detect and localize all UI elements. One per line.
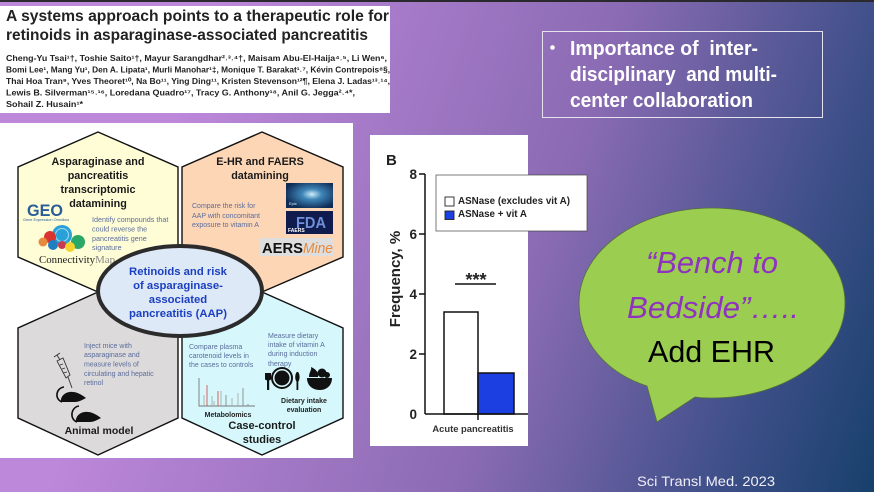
icon: mice <box>57 387 101 422</box>
y axis <box>409 167 425 422</box>
callout: bench to bedside speech bubble <box>579 208 845 422</box>
text block: animal model description <box>84 343 154 387</box>
callout: bench to bedside speech bubble: Bedside”….. <box>627 290 799 325</box>
text block: author list: Thai Hoa Tran⁹, Yves Theoret¹⁰, Na Bo¹¹, Ying Ding¹¹, Kristen Stevenson¹²¶, Elena J. Ladas¹³˒¹⁴, <box>6 76 390 86</box>
icon: Connectivity Map logo: ConnectivityMap <box>39 255 115 266</box>
label: metabolomics: Metabolomics <box>205 412 251 419</box>
centre oval: retinoids and AAP risk <box>98 246 262 336</box>
hexagon: transcriptomic datamining: datamining <box>69 198 127 210</box>
y axis: 4 <box>409 287 417 302</box>
label: case-control studies: Case-control <box>228 420 296 432</box>
callout: collaboration box: center collaboration <box>570 90 753 112</box>
text block: animal model description: retinol <box>84 380 104 387</box>
text block: animal model description: asparaginase and <box>84 352 140 359</box>
icon: FDA FAERS logo: FAERS <box>288 228 305 234</box>
callout: collaboration box: disciplinary and multi- <box>570 64 777 86</box>
panel: systems approach hexagon diagram <box>0 123 353 458</box>
chart legend: ASNase (excludes vit A) <box>458 196 570 207</box>
label: dietary intake evaluation: Dietary intake <box>281 398 327 405</box>
icon: Connectivity Map logo <box>38 225 115 266</box>
hexagon: transcriptomic datamining: pancreatitis <box>68 170 128 182</box>
hexagon: transcriptomic datamining: transcriptomic <box>60 184 136 196</box>
text block: dietary description: intake of vitamin A <box>268 342 325 349</box>
callout: collaboration box: Importance of inter- <box>570 38 758 60</box>
text block: E-HR description: exposure to vitamin A <box>192 222 259 229</box>
y axis: 6 <box>409 227 417 242</box>
icon: GEO logo: Gene Expression Omnibus <box>23 218 69 222</box>
chart legend <box>436 175 587 231</box>
chart: metabolomics spectrum <box>199 378 255 406</box>
text block: transcriptomic description: pancreatitis gene <box>92 234 147 243</box>
text block: transcriptomic description <box>92 215 168 252</box>
hexagon: E-HR and FAERS datamining: E-HR and FAERS <box>216 156 304 168</box>
callout: collaboration box <box>542 32 822 118</box>
hexagon: animal model <box>18 292 178 455</box>
centre oval: retinoids and AAP risk: of asparaginase- <box>133 280 223 292</box>
text block: E-HR description <box>192 203 260 229</box>
callout: bench to bedside speech bubble: Add EHR <box>648 334 775 369</box>
label: dietary intake evaluation <box>281 398 327 414</box>
label: dietary intake evaluation: evaluation <box>287 407 321 414</box>
heading: paper title <box>6 8 389 44</box>
text block: plasma description: Compare plasma <box>189 344 242 351</box>
heading: paper title: A systems approach points to a therapeutic role for <box>6 8 389 25</box>
y axis: 8 <box>409 167 417 182</box>
icon: GEO logo: GEO <box>27 201 63 220</box>
x axis label: Acute pancreatitis <box>432 423 514 434</box>
text block: animal model description: measure levels of <box>84 362 139 368</box>
icon: FDA FAERS logo: FDA <box>296 215 326 232</box>
bar: ASNase plus vitamin A <box>478 373 514 414</box>
text block: E-HR description: Compare the risk for <box>192 203 256 210</box>
hexagon: transcriptomic datamining <box>18 132 178 292</box>
text block: plasma description <box>189 344 254 369</box>
label: panel letter B: B <box>386 152 397 169</box>
text block: animal model description: circulating and hepatic <box>84 371 154 378</box>
icon: AERSMine logo: AERS <box>262 240 303 257</box>
text block: author list: Bomi Lee¹, Mang Yu¹, Den A. Lipata¹, Murli Manohar¹‡, Monique T. Barakat¹˒⁷, Kévin Contrepois⁸§, <box>6 64 390 74</box>
hexagon: case-control studies <box>182 292 343 455</box>
chart legend: ASNase + vit A <box>458 209 527 220</box>
x axis <box>425 414 528 420</box>
text block: dietary description <box>268 333 325 368</box>
text block: author list: Sohail Z. Husain¹* <box>6 99 84 109</box>
bar: ASNase excluding vitamin A <box>444 312 478 414</box>
icon: syringe <box>54 353 72 388</box>
text block: transcriptomic description: could reverse the <box>92 224 147 234</box>
text block: author list <box>6 53 390 109</box>
centre oval: retinoids and AAP risk: pancreatitis (AAP) <box>129 308 227 320</box>
panel: paper title and authors <box>0 6 390 113</box>
panel: bar chart of acute pancreatitis frequency <box>370 135 587 446</box>
hexagon: E-HR and FAERS datamining <box>182 132 343 292</box>
label: case-control studies <box>228 420 296 446</box>
icon: data image <box>286 183 333 208</box>
hexagon: transcriptomic datamining: Asparaginase and <box>51 156 145 168</box>
text block: transcriptomic description: Identify compounds that <box>92 215 168 224</box>
centre oval: retinoids and AAP risk: Retinoids and risk <box>129 266 228 278</box>
text block: dietary description: therapy <box>268 361 292 368</box>
text block: plasma description: the cases to controls <box>189 362 254 369</box>
text block: author list: Lewis B. Silverman¹⁵˒¹⁶, Loredana Quadro¹⁷, Tracy G. Anthony¹⁸, Anil G. Jegga²˒⁴*, <box>6 88 355 98</box>
significance marker <box>455 270 496 290</box>
label: case-control studies: studies <box>243 434 281 446</box>
text block: transcriptomic description: signature <box>92 243 122 252</box>
significance marker: *** <box>465 270 487 290</box>
text block: animal model description: Inject mice with <box>84 343 132 350</box>
icon: FDA FAERS logo <box>286 211 333 234</box>
citation: Sci Transl Med. 2023 <box>637 473 775 489</box>
heading: paper title: retinoids in asparaginase-associated pancreatitis <box>6 27 368 44</box>
y axis title: Frequency, % <box>387 231 404 327</box>
text block: dietary description: during induction <box>268 351 318 358</box>
text block: E-HR description: AAP with concomitant <box>192 213 260 220</box>
centre oval: retinoids and AAP risk: associated <box>149 294 207 306</box>
icon: AERSMine logo <box>260 238 334 257</box>
text block: author list: Cheng-Yu Tsai¹†, Toshie Saito¹†, Mayur Sarangdhar²˒³˒⁴†, Maisam Abu-El-Haija⁴˒⁵, Li Wen⁶, <box>6 53 387 63</box>
y axis: 0 <box>409 407 417 422</box>
label: animal model: Animal model <box>65 425 133 437</box>
icon: AERSMine logo: Mine <box>303 240 333 257</box>
icon: plate, cutlery and fruit bowl <box>265 367 332 390</box>
icon: data image: Epic <box>289 201 297 206</box>
text block: dietary description: Measure dietary <box>268 333 319 340</box>
y axis: 2 <box>409 347 417 362</box>
callout: bench to bedside speech bubble: “Bench to <box>646 245 778 280</box>
text block: plasma description: carotenoid levels in <box>189 353 249 360</box>
hexagon: E-HR and FAERS datamining: datamining <box>231 170 289 182</box>
